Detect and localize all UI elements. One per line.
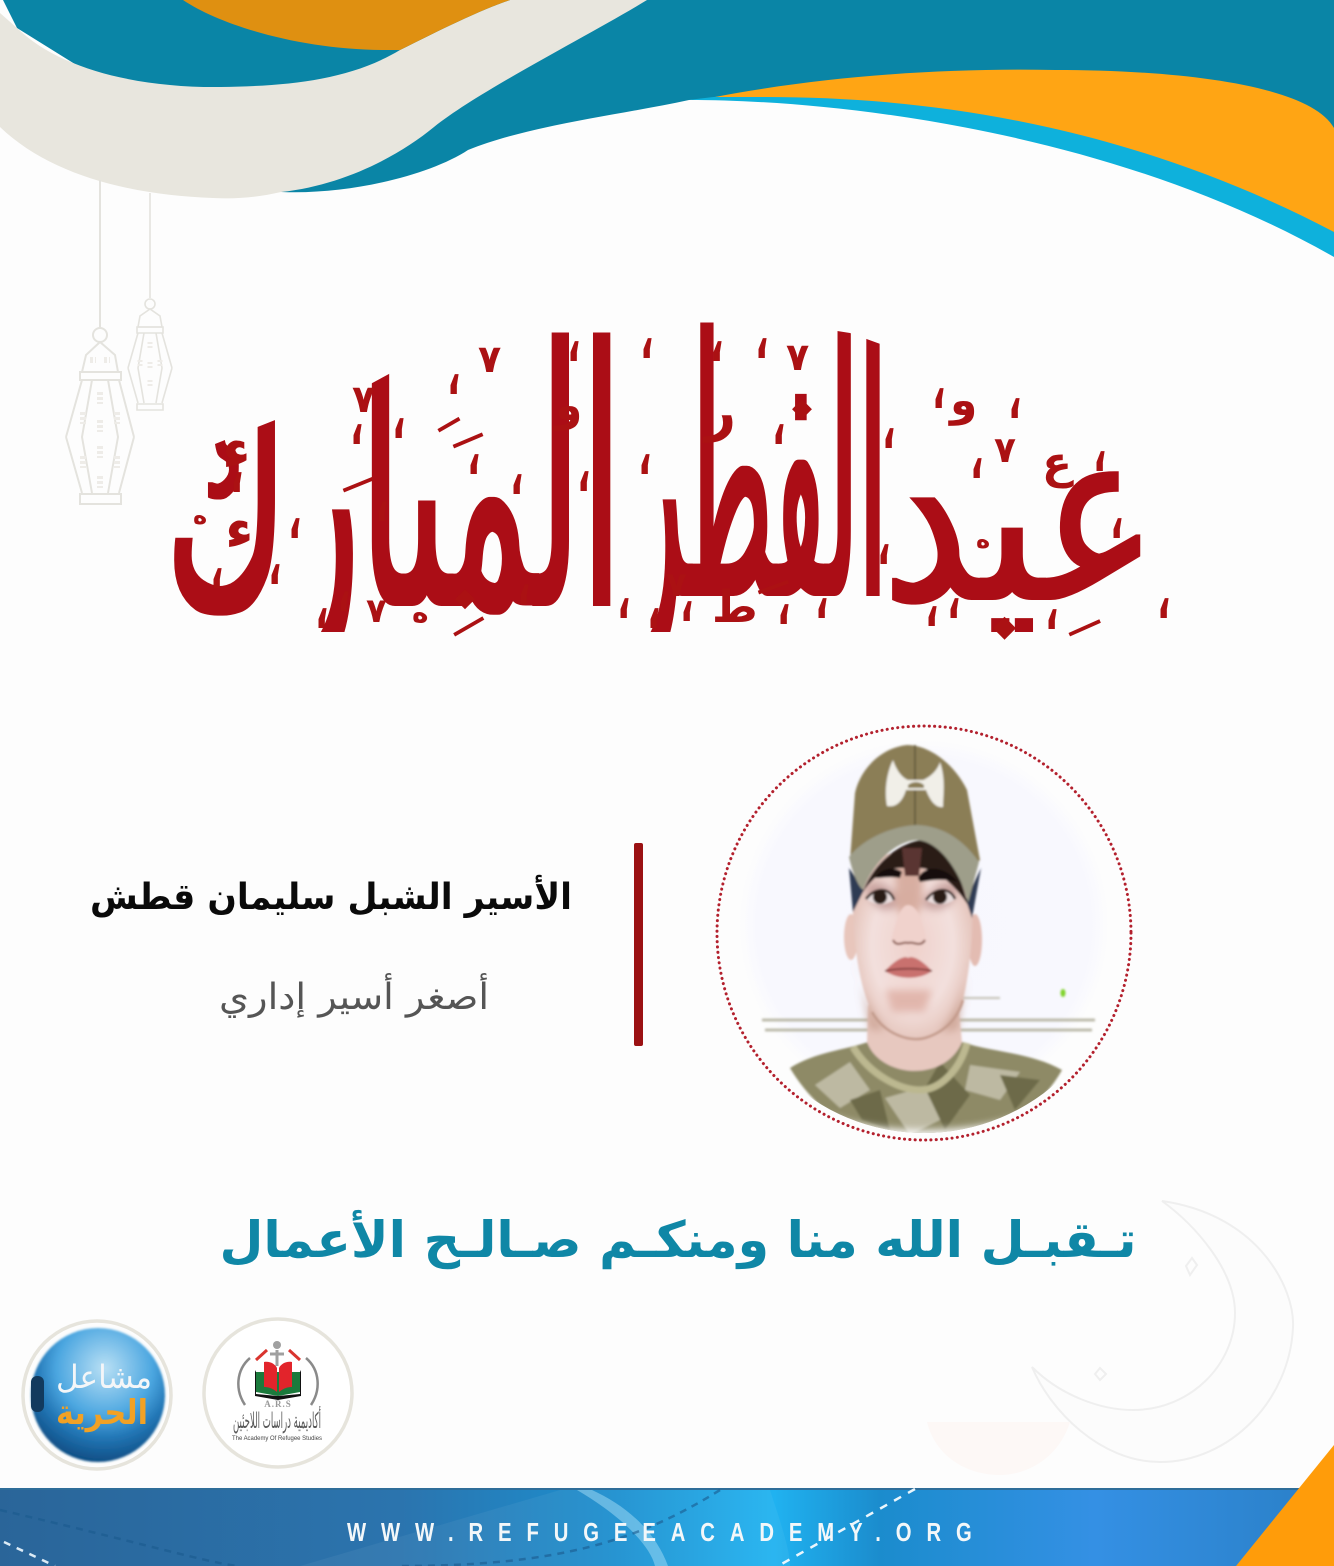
slanted kashida strokes: ـ xyxy=(329,445,378,502)
logo: Academy of Refugee Studies: أكاديمية دراسات اللاجئين xyxy=(233,1406,321,1434)
hamza, waw and ain ornaments: و xyxy=(948,375,977,426)
forehead shadow and hair under brim xyxy=(863,840,968,905)
crescent moon watermark xyxy=(1032,1201,1293,1462)
small diacritic marks: ، xyxy=(1093,415,1107,486)
English academy name: The Academy Of Refugee Studies xyxy=(232,1436,322,1442)
v-shaped ornaments: ٧ xyxy=(366,591,387,631)
ears xyxy=(844,914,858,960)
hamza, waw and ain ornaments: ◆ xyxy=(993,609,1016,644)
eyes xyxy=(866,892,955,904)
small diacritic marks: ، xyxy=(777,568,791,639)
small diacritic marks: ، xyxy=(882,392,896,463)
portrait with dotted ring xyxy=(717,726,1131,1170)
mouth xyxy=(885,957,932,978)
eyebrows xyxy=(875,869,958,882)
name heading: الأسير الشبل سليمان قطش xyxy=(90,874,572,918)
green speck xyxy=(1060,989,1066,997)
orange wave xyxy=(715,70,1334,232)
v-shaped ornaments: ٧ xyxy=(666,565,687,605)
small diacritic marks: ، xyxy=(337,555,351,626)
small diacritic marks: ، xyxy=(1008,362,1022,433)
large lantern xyxy=(66,180,134,504)
v-shaped ornaments: ٧ xyxy=(786,335,809,379)
small diacritic marks: ، xyxy=(567,305,581,376)
greeting line: تـقبـل الله منا ومنكـم صـالـح الأعمال xyxy=(220,1209,1136,1270)
small diacritic marks: ، xyxy=(447,338,461,409)
neck xyxy=(867,1000,962,1071)
small lantern xyxy=(128,193,172,410)
v-shaped ornaments xyxy=(193,335,1016,631)
small diacritic marks: ، xyxy=(772,388,786,459)
small diacritic marks: ، xyxy=(947,562,961,633)
subtitle: أصغر أسير إداري xyxy=(219,973,489,1018)
small diacritic marks: ، xyxy=(288,482,302,553)
book emblem xyxy=(238,1341,318,1405)
slanted kashida strokes: ـ xyxy=(746,547,793,604)
slanted kashida strokes: ـ xyxy=(439,401,488,458)
title words: الفطر xyxy=(628,263,887,686)
small diacritic marks: ، xyxy=(710,305,724,376)
A.R.S label: A.R.S xyxy=(264,1399,292,1409)
small diacritic marks: ، xyxy=(640,302,654,373)
logo: Mashael Al-Hurriya xyxy=(23,1321,171,1469)
v-shaped ornaments: ٧ xyxy=(478,337,501,381)
small diacritic marks: ، xyxy=(925,570,939,641)
hamza, waw and ain ornaments: ◆ xyxy=(455,583,475,613)
hanging lanterns xyxy=(66,180,172,504)
small diacritic marks: ، xyxy=(467,418,481,489)
dotted ring xyxy=(717,726,1131,1140)
small diacritic marks: ، xyxy=(510,438,524,509)
small diacritic marks: ، xyxy=(392,382,406,453)
hamza, waw and ain ornaments xyxy=(222,375,1074,644)
wall lines xyxy=(762,1020,1095,1030)
small diacritic marks: ، xyxy=(1157,562,1171,633)
face xyxy=(853,850,972,1039)
v-shaped ornaments: ٧ xyxy=(352,377,375,421)
title words: المبارك xyxy=(166,271,622,696)
chin edge xyxy=(872,1000,963,1039)
logo: Academy of Refugee Studies xyxy=(204,1319,352,1467)
top wave banner xyxy=(0,0,1334,257)
slanted kashida strokes: ـ xyxy=(436,586,490,646)
cap crown xyxy=(850,745,980,862)
vertical divider xyxy=(634,843,643,1046)
dark orange area xyxy=(183,0,510,50)
bottom vignette xyxy=(834,1111,1011,1133)
v-shaped ornaments: ه xyxy=(976,526,990,554)
hamza, waw and ain ornaments: ◆ xyxy=(792,393,812,423)
v-shaped ornaments: ه xyxy=(193,502,207,530)
calligraphy title: Eid al-Fitr Mubarak xyxy=(174,322,1169,640)
side straps xyxy=(849,868,981,918)
website address: WWW.REFUGEEACADEMY.ORG xyxy=(347,1518,972,1547)
slanted kashida strokes: ـ xyxy=(419,386,466,441)
small diacritic marks: ، xyxy=(647,572,661,643)
small diacritic marks: ، xyxy=(755,302,769,373)
small diacritic marks: ، xyxy=(638,418,652,489)
small diacritic marks xyxy=(210,302,1171,644)
footer band xyxy=(0,1445,1334,1566)
hamza, waw and ain ornaments: ء xyxy=(225,497,254,562)
small diacritic marks: ، xyxy=(1045,573,1059,644)
small diacritic marks: ، xyxy=(315,572,329,643)
small diacritic marks: ، xyxy=(230,436,244,507)
v-shaped ornaments: ٧ xyxy=(994,430,1016,471)
small diacritic marks: ، xyxy=(577,435,591,506)
small diacritic marks: ، xyxy=(517,548,531,619)
hamza, waw and ain ornaments: ر xyxy=(702,380,736,443)
slanted kashida strokes: ـ xyxy=(1054,587,1105,646)
small diacritic marks: ، xyxy=(877,508,891,579)
cream swoosh xyxy=(0,0,647,198)
small diacritic marks: ، xyxy=(350,388,364,459)
orange corner xyxy=(1236,1445,1334,1566)
light blue stripe xyxy=(689,92,1334,257)
small diacritic marks: ، xyxy=(617,562,631,633)
title words: عيد xyxy=(882,372,1158,659)
small diacritic marks: ، xyxy=(210,532,224,603)
v-shaped ornaments: ه xyxy=(412,596,429,629)
title words xyxy=(174,322,1140,632)
cap logo xyxy=(886,760,944,807)
nose xyxy=(900,904,918,920)
small diacritic marks: ، xyxy=(815,562,829,633)
logo: Mashael Al-Hurriya: مشاعل xyxy=(56,1358,152,1396)
hamza, waw and ain ornaments: ء xyxy=(222,417,251,482)
collar xyxy=(853,1043,967,1090)
hamza, waw and ain ornaments: ع xyxy=(1042,438,1074,489)
cap brim xyxy=(849,825,979,903)
small diacritic marks: ، xyxy=(932,352,946,423)
logo: Mashael Al-Hurriya: الحرية xyxy=(56,1393,148,1433)
soft portrait background xyxy=(739,740,1109,1110)
small diacritic marks: ، xyxy=(970,422,984,493)
small diacritic marks: ، xyxy=(375,465,389,536)
eye socket and forehead shading xyxy=(856,860,968,1032)
portrait photograph illustration xyxy=(762,745,1095,1170)
small diacritic marks: ، xyxy=(680,565,694,636)
faint pink half circle xyxy=(927,1422,1070,1475)
small diacritic marks: ، xyxy=(1110,482,1124,553)
hamza, waw and ain ornaments: و xyxy=(553,380,582,431)
teal wave xyxy=(3,0,1334,192)
small diacritic marks: ، xyxy=(268,528,282,599)
camo shirt xyxy=(789,1041,1063,1133)
hamza, waw and ain ornaments: ط xyxy=(712,582,758,633)
slanted kashida strokes xyxy=(329,386,1105,646)
